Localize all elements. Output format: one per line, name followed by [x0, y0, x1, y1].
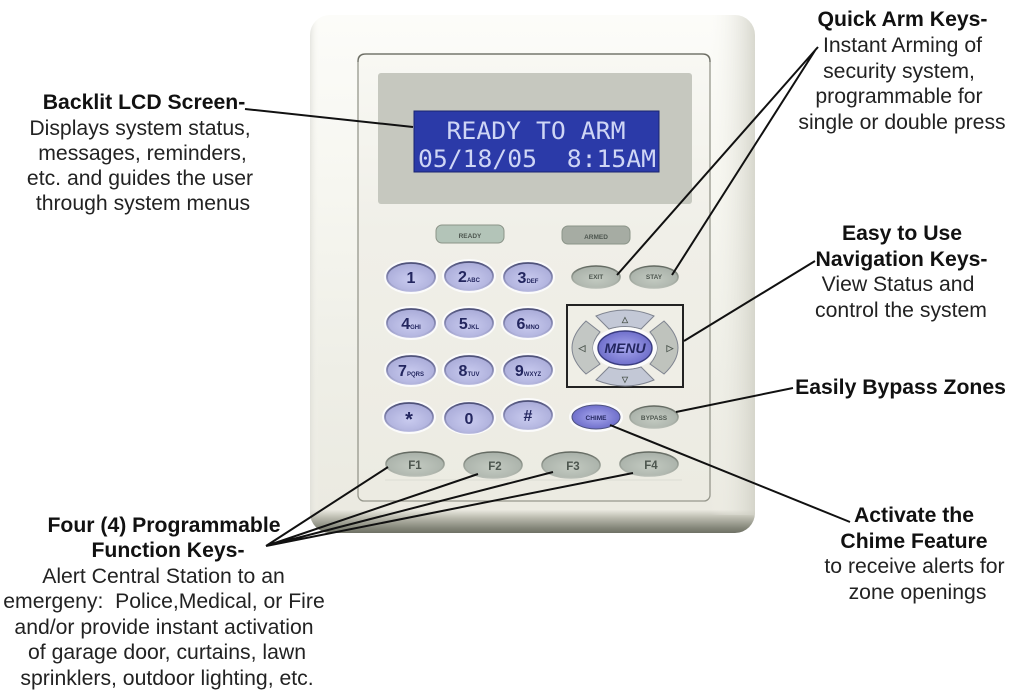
key 0: 0 — [465, 411, 474, 428]
callout: programmable function keys — [3, 514, 325, 690]
callout: programmable function keys: Function Keys- — [91, 539, 245, 562]
status light: ready — [436, 225, 504, 243]
key 4: 4GHI — [401, 316, 421, 333]
callout: quick arm keys — [798, 8, 1006, 134]
F4 key — [620, 452, 678, 476]
leader line: bypass — [676, 388, 793, 412]
key 7: 7PQRS — [398, 363, 424, 380]
exit key: EXIT — [589, 274, 603, 281]
callout: backlit LCD screen — [27, 91, 253, 215]
key 0 — [442, 401, 496, 435]
key 7 — [384, 353, 438, 387]
F2 key — [464, 452, 522, 478]
F2 key: F2 — [488, 461, 502, 473]
F3 key: F3 — [566, 461, 580, 473]
leader lines: function keys — [266, 467, 633, 546]
outer bezel — [310, 15, 755, 533]
key hash: # — [524, 408, 533, 425]
key 9: 9WXYZ — [515, 363, 541, 380]
keypad device — [310, 15, 755, 533]
leader line: LCD screen — [245, 109, 413, 127]
key 1 — [384, 260, 438, 294]
callout: programmable function keys: of garage door, curtains, lawn — [28, 641, 306, 664]
leader line: chime — [610, 425, 850, 522]
LCD screen — [414, 111, 659, 173]
chime key — [569, 402, 623, 432]
callout: backlit LCD screen: Backlit LCD Screen- — [43, 91, 245, 114]
key 6: 6MNO — [517, 316, 540, 333]
menu key: MENU — [604, 340, 646, 356]
key 5: 5JKL — [459, 316, 479, 333]
callout: programmable function keys: sprinklers, outdoor lighting, etc. — [20, 667, 314, 690]
callout: programmable function keys: emergeny: Police,Medical, or Fire — [3, 590, 325, 613]
inner panel — [358, 54, 710, 501]
callout: navigation keys: Navigation Keys- — [816, 248, 987, 271]
callout: programmable function keys: Four (4) Programmable — [47, 514, 281, 537]
key 3 — [501, 260, 555, 294]
leader line: navigation keys — [684, 261, 815, 341]
key hash — [501, 398, 555, 432]
callout: chime feature — [824, 504, 1005, 604]
key 8 — [442, 353, 496, 387]
F3 key — [542, 452, 600, 478]
callout: bypass zones: Easily Bypass Zones — [795, 376, 1006, 399]
key 3: 3DEF — [518, 270, 539, 287]
LCD screen: 05/18/05 8:15AM — [418, 145, 656, 173]
LCD screen: READY TO ARM — [446, 117, 626, 145]
bypass key: BYPASS — [641, 415, 668, 422]
function keys — [386, 452, 678, 478]
callout: quick arm keys: programmable for — [815, 85, 983, 108]
navigation keys — [567, 305, 683, 387]
callout: chime feature: to receive alerts for — [824, 555, 1005, 578]
callout: chime feature: Chime Feature — [840, 530, 988, 553]
navigation box — [567, 305, 683, 387]
stay key: STAY — [646, 274, 663, 281]
key 1: 1 — [407, 270, 416, 287]
F4 key: F4 — [644, 460, 658, 472]
callout: quick arm keys: security system, — [823, 60, 975, 83]
chime key: CHIME — [586, 415, 607, 422]
F1 key — [386, 452, 444, 476]
down key: ▽ — [621, 375, 629, 384]
LCD housing — [378, 73, 692, 204]
status light: armed: ARMED — [584, 234, 608, 241]
callout: chime feature: Activate the — [854, 504, 974, 527]
callout: navigation keys: control the system — [815, 299, 987, 322]
number keys — [382, 259, 555, 435]
callout: quick arm keys: Instant Arming of — [823, 34, 982, 57]
callout: backlit LCD screen: etc. and guides the user — [27, 167, 253, 190]
status light: ready: READY — [459, 233, 482, 240]
callout: navigation keys — [815, 222, 987, 322]
F1 key: F1 — [408, 460, 422, 472]
callout: backlit LCD screen: messages, reminders, — [38, 142, 247, 165]
key 2 — [442, 259, 496, 293]
callout: chime feature: zone openings — [849, 581, 986, 604]
callout: quick arm keys: Quick Arm Keys- — [818, 8, 987, 31]
callout: navigation keys: Easy to Use — [842, 222, 962, 245]
left key: ◁ — [578, 343, 587, 353]
callout: quick arm keys: single or double press — [798, 111, 1006, 134]
callout: programmable function keys: Alert Central Station to an — [42, 565, 285, 588]
quick arm keys — [572, 266, 678, 288]
callout: programmable function keys: and/or provide instant activation — [14, 616, 314, 639]
key 4 — [384, 306, 438, 340]
right key: ▷ — [666, 343, 675, 353]
up key: △ — [621, 315, 629, 324]
key star — [382, 400, 436, 434]
key star: * — [405, 409, 413, 431]
key 6 — [501, 306, 555, 340]
key 9 — [501, 353, 555, 387]
callout: backlit LCD screen: through system menus — [36, 192, 250, 215]
callout: backlit LCD screen: Displays system status, — [29, 117, 251, 140]
key 5 — [442, 306, 496, 340]
key 2: 2ABC — [458, 269, 481, 286]
key 8: 8TUV — [459, 363, 479, 380]
leader lines: quick arm keys — [617, 47, 818, 275]
callout: navigation keys: View Status and — [822, 273, 974, 296]
status light: armed — [562, 226, 630, 244]
bypass key — [630, 406, 678, 428]
